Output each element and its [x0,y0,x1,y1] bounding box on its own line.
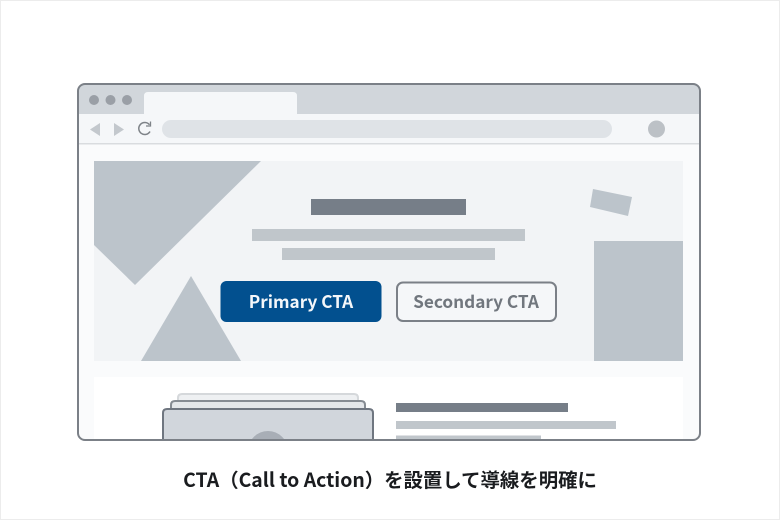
primary CTA button: Primary CTA [249,288,354,313]
stacked image cards [162,393,374,439]
lower text placeholder line 1 [396,421,616,429]
hero text placeholder line 2 [282,248,495,260]
hero section [94,161,683,361]
decorative rectangle [594,241,683,361]
active tab [144,92,297,114]
lower heading placeholder [396,403,568,412]
browser toolbar [79,120,699,144]
profile avatar [648,120,665,138]
address bar [162,120,612,138]
lower text placeholder line 2 [396,436,541,439]
lower content section [162,393,616,439]
primary CTA button [220,281,382,322]
browser tab bar [78,84,700,114]
back arrow icon [90,123,100,136]
large decorative triangle [94,161,261,285]
hero text placeholder line 1 [252,229,525,241]
decorative tilted rectangle [590,189,632,216]
reload icon [139,122,150,135]
secondary CTA button: Secondary CTA [413,288,540,313]
hero heading placeholder [311,199,466,215]
caption: CTA（Call to Action）を設置して導線を明確に [183,464,597,493]
forward arrow icon [114,123,124,136]
window control dots [89,95,132,105]
secondary CTA button [397,282,556,321]
browser window [78,84,700,471]
small decorative triangle [141,276,241,361]
